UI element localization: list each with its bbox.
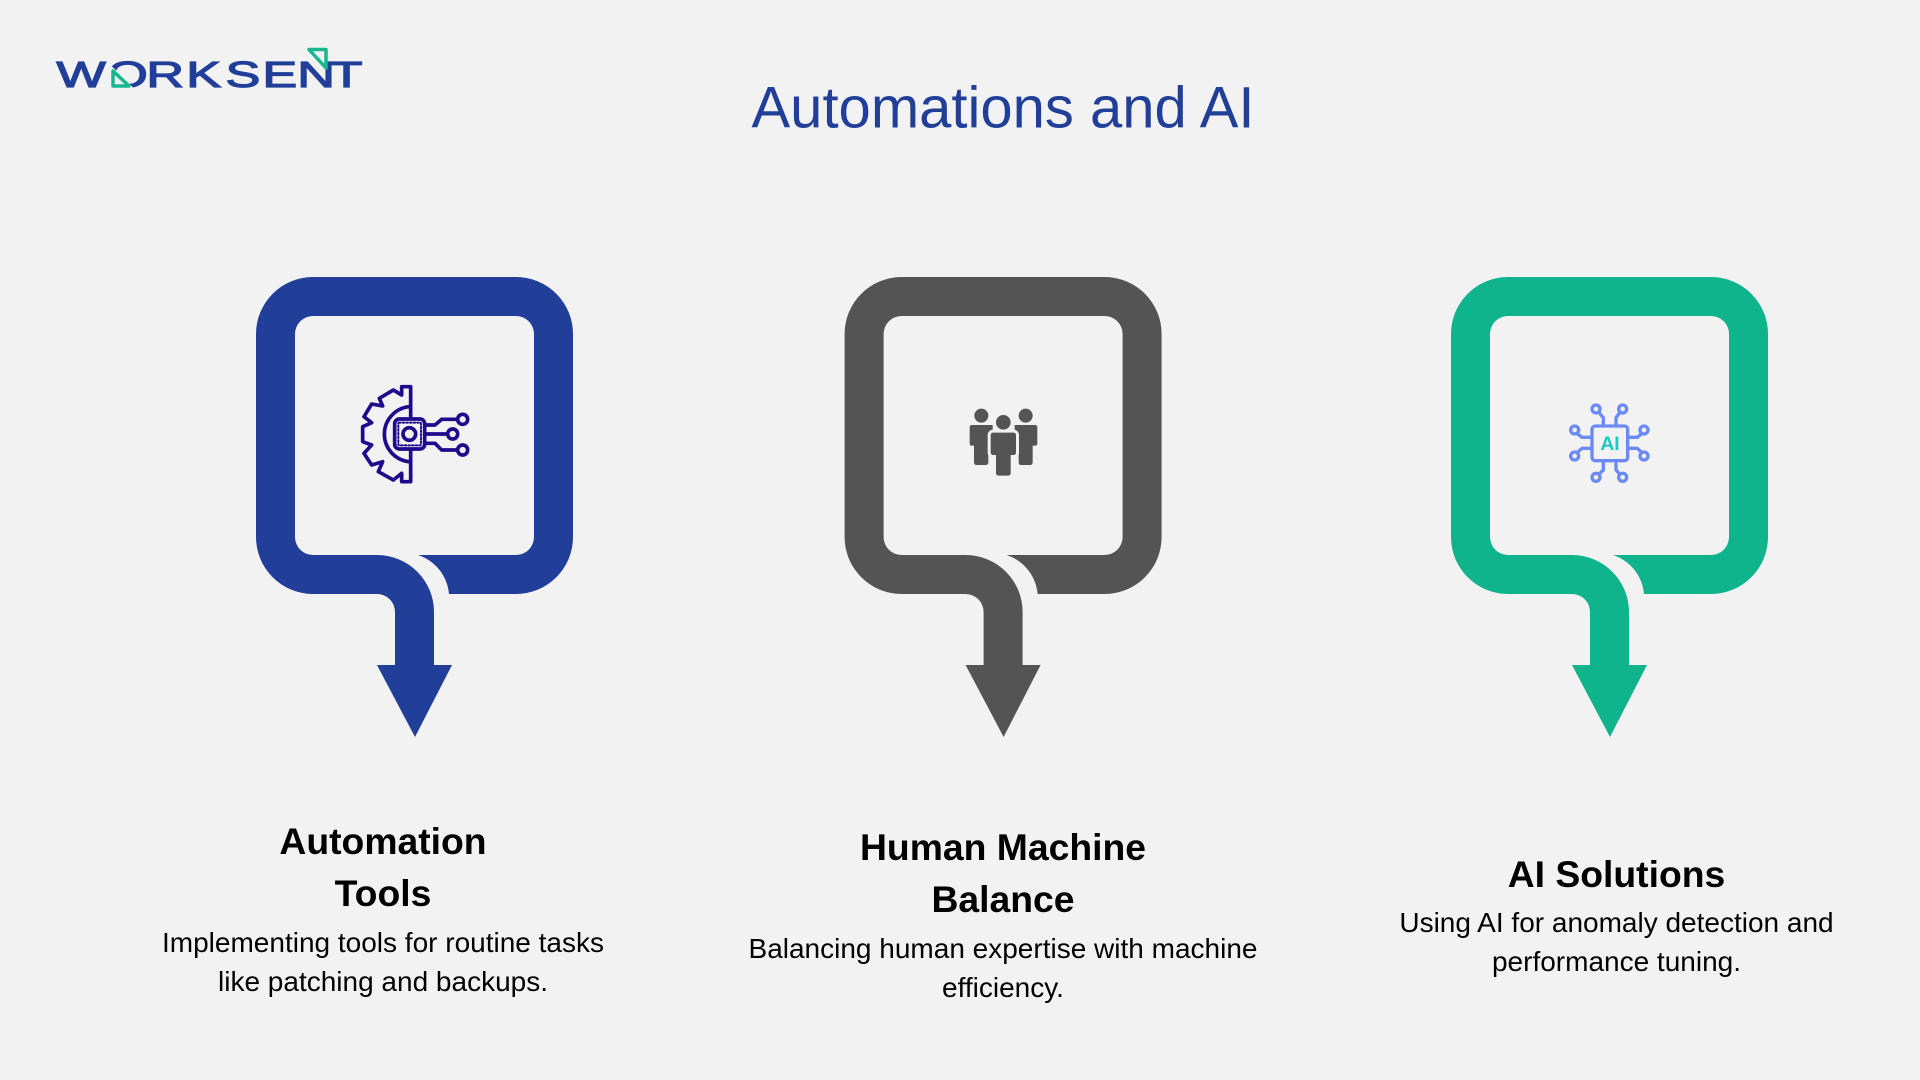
description: human machine balance: efficiency. [942,972,1064,1003]
description: AI solutions: Using AI for anomaly detection and [1399,907,1834,938]
logo: Worksent: WORKSENT [57,54,362,95]
heading: AI solutions: AI Solutions [1508,853,1725,895]
description: AI solutions [1399,907,1834,977]
icon: AI chip: AI [1600,434,1620,455]
description: human machine balance: Balancing human expertise with machine [749,933,1257,964]
description: automation tools: Implementing tools for routine tasks [162,927,604,958]
text block: human machine balance [749,826,1257,1003]
heading: automation tools: Tools [335,872,431,914]
description: automation tools [162,927,604,997]
icon: AI chip [1571,405,1648,481]
description: human machine balance [749,933,1257,1003]
heading: automation tools: Automation [279,820,487,862]
text block: AI solutions [1399,853,1834,977]
heading: human machine balance: Human Machine [860,826,1146,868]
heading: human machine balance [860,826,1146,920]
icon: three people [970,409,1037,476]
panel: human machine balance arrow [845,277,1162,737]
heading: automation tools [279,820,487,914]
description: automation tools: like patching and backups. [218,966,548,997]
title: Automations and AI [752,76,1254,140]
heading: human machine balance: Balance [931,878,1075,920]
panel: AI solutions arrow [1451,277,1768,737]
text block: automation tools [162,820,604,997]
description: AI solutions: performance tuning. [1492,946,1741,977]
icon: gear with circuit [363,387,468,482]
panel: automation tools arrow [256,277,573,737]
